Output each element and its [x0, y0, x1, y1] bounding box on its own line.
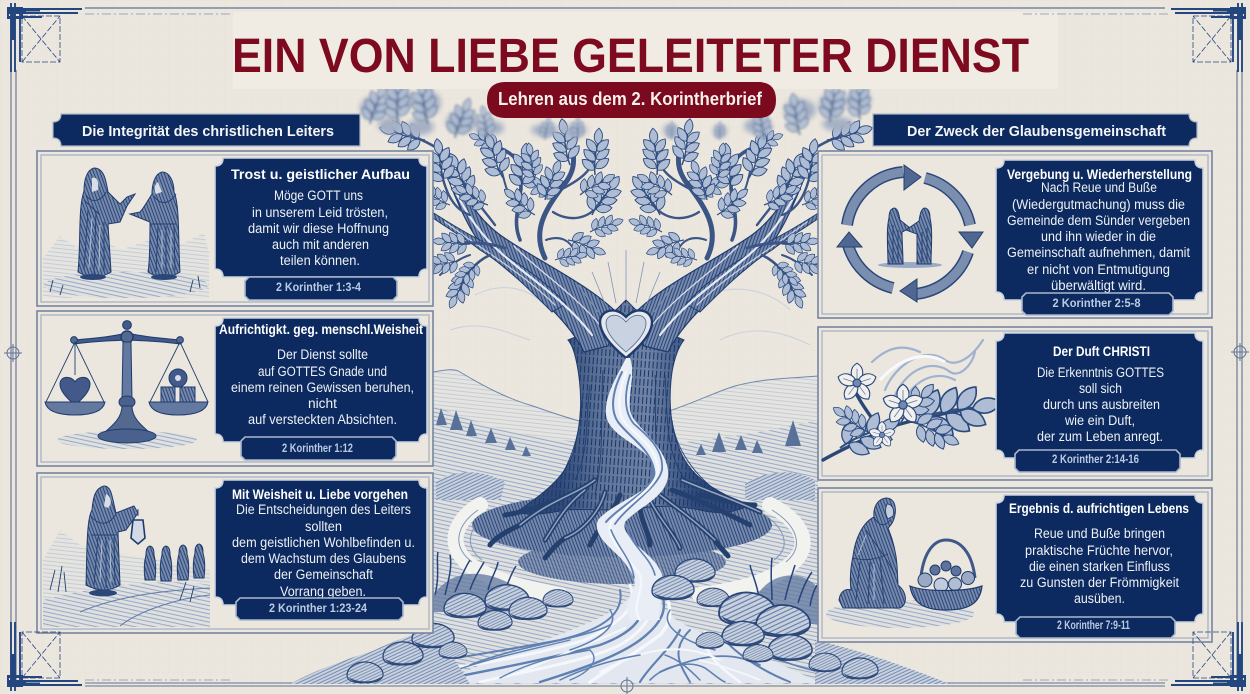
body text: durch uns ausbreiten	[1043, 397, 1160, 412]
body text: Nach Reue und Buße	[1041, 180, 1157, 195]
blurred foliage under the title	[356, 77, 873, 143]
body text	[248, 188, 389, 268]
body text: Reue und Buße bringen	[1034, 526, 1165, 541]
winding side paths and lower ground	[433, 500, 818, 684]
scripture reference: 2 Korinther 7:9-11	[1057, 620, 1130, 632]
registration mark: bottom	[618, 677, 636, 694]
tree trunk and roots	[490, 300, 760, 558]
heading: Vergebung u. Wiederherstellung	[1007, 166, 1192, 182]
body text	[1007, 180, 1190, 293]
body text: (Wiedergutmachung) muss die	[1012, 197, 1185, 212]
stream of water flowing down the trunk	[597, 358, 668, 620]
scripture reference: 2 Korinther 1:3-4	[276, 282, 362, 294]
heading: Trost u. geistlicher Aufbau	[231, 166, 410, 182]
scripture reference	[241, 437, 396, 460]
info box	[996, 333, 1203, 472]
title band	[233, 12, 1058, 89]
body text: Die Erkenntnis GOTTES	[1037, 365, 1164, 380]
body text: einem reinen Gewissen beruhen,	[231, 380, 414, 395]
corner ornament: bottom left	[8, 622, 232, 691]
body text: die einen starken Einfluss	[1029, 559, 1170, 574]
river at the bottom	[300, 530, 860, 683]
scripture reference: 2 Korinther 1:12	[282, 443, 353, 455]
body text: er nicht von Entmutigung	[1027, 262, 1170, 277]
body text: zu Gunsten der Frömmigkeit	[1020, 575, 1179, 590]
body text: auf versteckten Absichten.	[248, 412, 397, 427]
body text: der Gemeinschaft	[274, 567, 373, 582]
right column heading: Der Zweck der Glaubensgemeinschaft	[907, 123, 1166, 140]
body text: Vorrang geben.	[280, 584, 366, 599]
panel: Mit Weisheit u. Liebe vorgehen	[37, 473, 433, 633]
info box	[996, 160, 1203, 315]
panel: Trost u. geistlicher Aufbau	[37, 151, 433, 306]
illustration: circle of arrows around two figures	[837, 165, 983, 302]
scripture reference: 2 Korinther 1:23-24	[269, 603, 368, 615]
body text: Die Entscheidungen des Leiters	[236, 502, 411, 517]
body text: auch mit anderen	[272, 237, 369, 252]
scripture reference	[1015, 450, 1180, 472]
scripture reference: 2 Korinther 2:5-8	[1052, 298, 1141, 310]
info box	[996, 495, 1203, 638]
icon: heart in the trunk	[600, 310, 652, 358]
heading: Ergebnis d. aufrichtigen Lebens	[1009, 500, 1189, 516]
body text: Gemeinschaft aufnehmen, damit	[1007, 245, 1190, 260]
body text: dem geistlichen Wohlbefinden u.	[232, 535, 415, 550]
scripture reference	[1016, 617, 1175, 638]
body text: der zum Leben anregt.	[1037, 429, 1163, 444]
body text	[232, 502, 415, 599]
body text	[1020, 526, 1179, 606]
info box	[215, 158, 427, 300]
illustration: leader with lantern guiding followers	[43, 486, 210, 627]
scripture reference	[1022, 293, 1173, 315]
body text: auf GOTTES Gnade und	[258, 364, 387, 379]
body text: dem Wachstum des Glaubens	[241, 551, 406, 566]
body text: in unserem Leid trösten,	[252, 205, 388, 220]
corner ornament: bottom right	[1021, 622, 1245, 691]
heading: Aufrichtigkt. geg. menschl.Weisheit	[219, 321, 423, 337]
left column heading: Die Integrität des christlichen Leiters	[82, 123, 334, 140]
tree crown, left side	[375, 113, 631, 352]
heading: Mit Weisheit u. Liebe vorgehen	[232, 486, 408, 502]
body text	[1037, 365, 1164, 444]
body text: nicht	[308, 396, 337, 411]
illustration: balance scale with heart and coins	[45, 321, 208, 449]
body text: Der Dienst sollte	[277, 347, 368, 362]
panel: Der Duft CHRISTI	[818, 327, 1212, 480]
heading: Der Duft CHRISTI	[1053, 343, 1150, 359]
body text: Möge GOTT uns	[274, 188, 363, 203]
panel: Vergebung u. Wiederherstellung	[818, 151, 1212, 318]
corner ornament: top right	[1021, 3, 1245, 72]
panel: Ergebnis d. aufrichtigen Lebens	[818, 488, 1212, 642]
body text: und ihn wieder in die	[1041, 229, 1156, 244]
info box	[215, 480, 427, 620]
left column heading	[53, 114, 360, 146]
illustration: flowering branch with fragrance	[823, 340, 1006, 467]
body text: soll sich	[1079, 381, 1122, 396]
body text: ausüben.	[1074, 591, 1125, 606]
body text: überwältigt wird.	[1051, 278, 1146, 293]
light rays above the heart	[578, 250, 674, 312]
scripture reference: 2 Korinther 2:14-16	[1052, 454, 1139, 466]
scripture reference	[236, 598, 403, 620]
body text: damit wir diese Hoffnung	[248, 221, 389, 236]
subtitle pill	[487, 82, 776, 118]
root mound	[472, 493, 772, 584]
registration mark: right	[1231, 343, 1249, 361]
corner ornament: top left	[8, 3, 232, 72]
scripture reference	[245, 277, 397, 300]
info box	[215, 318, 427, 460]
body text: teilen können.	[280, 253, 360, 268]
landscape: hills and meadows behind the tree	[433, 288, 818, 560]
tree crown, right side	[621, 113, 877, 352]
illustration: kneeling figure with fruit basket	[826, 498, 982, 628]
panel: Aufrichtigkeit gegenüber menschlicher Weisheit	[37, 311, 433, 466]
registration mark: left	[4, 344, 22, 362]
right column heading	[873, 114, 1197, 146]
rocks and grass in the foreground	[290, 552, 950, 684]
subtitle pill: Lehren aus dem 2. Korintherbrief	[498, 89, 763, 109]
body text: Gemeinde dem Sünder vergeben	[1007, 213, 1190, 228]
body text: sollten	[305, 519, 342, 534]
title: EIN VON LIEBE GELEITETER DIENST	[232, 30, 1029, 83]
body text: praktische Früchte hervor,	[1025, 543, 1173, 558]
body text	[231, 347, 414, 427]
illustration: two robed figures talking	[43, 168, 209, 298]
body text: wie ein Duft,	[1064, 413, 1135, 428]
